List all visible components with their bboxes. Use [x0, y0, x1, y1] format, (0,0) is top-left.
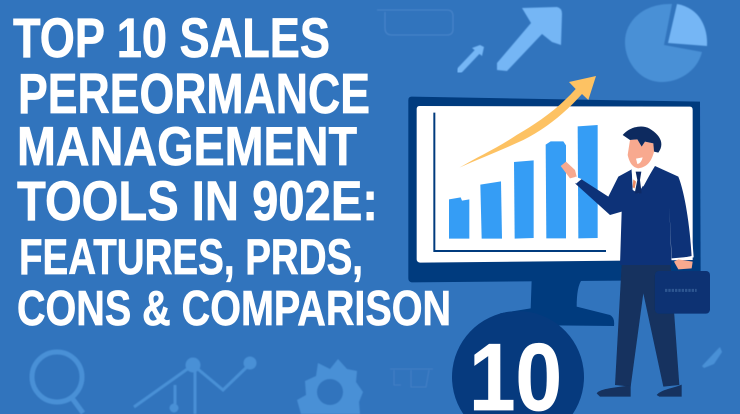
title: PEREORMANCE: [18, 62, 370, 126]
icon: line chart: [134, 358, 255, 414]
briefcase detail: [665, 286, 697, 295]
presenter: [561, 126, 710, 397]
icon: large growth arrow: [497, 7, 562, 71]
chart axes: [434, 113, 606, 251]
tie: [635, 172, 642, 193]
title: MANAGEMENT: [17, 115, 357, 177]
lower hand: [674, 259, 693, 269]
shoes: [597, 385, 682, 397]
face: [628, 139, 654, 168]
icon: faint pen: [702, 347, 722, 368]
hair: [623, 126, 661, 153]
shirt: [632, 165, 655, 190]
monitor stand: [500, 280, 614, 326]
monitor screen: [417, 106, 693, 263]
icon: gear: [297, 359, 363, 414]
briefcase: [655, 271, 710, 314]
icon: magnifying glass: [32, 352, 83, 413]
title: TOP 10 SALES: [13, 6, 330, 69]
pointing hand: [561, 162, 577, 178]
growth arrow: [459, 76, 596, 168]
trousers: [615, 264, 679, 387]
title: FEATURES, PRDS,: [19, 229, 363, 285]
monitor frame: [408, 97, 701, 282]
shirt cuff: [672, 227, 694, 260]
icon: faint outlined box: [377, 10, 453, 35]
jacket: [575, 166, 692, 265]
monitor and presenter illustration: [408, 76, 710, 397]
icon: pie chart: [625, 4, 707, 82]
icon: small growth arrow: [459, 45, 484, 71]
title: CONS & COMPARISON: [17, 282, 451, 336]
title: TOOLS IN 902E:: [17, 169, 378, 232]
title: [13, 6, 451, 336]
icon: faint device outline: [390, 369, 433, 387]
bar chart: [449, 125, 598, 239]
